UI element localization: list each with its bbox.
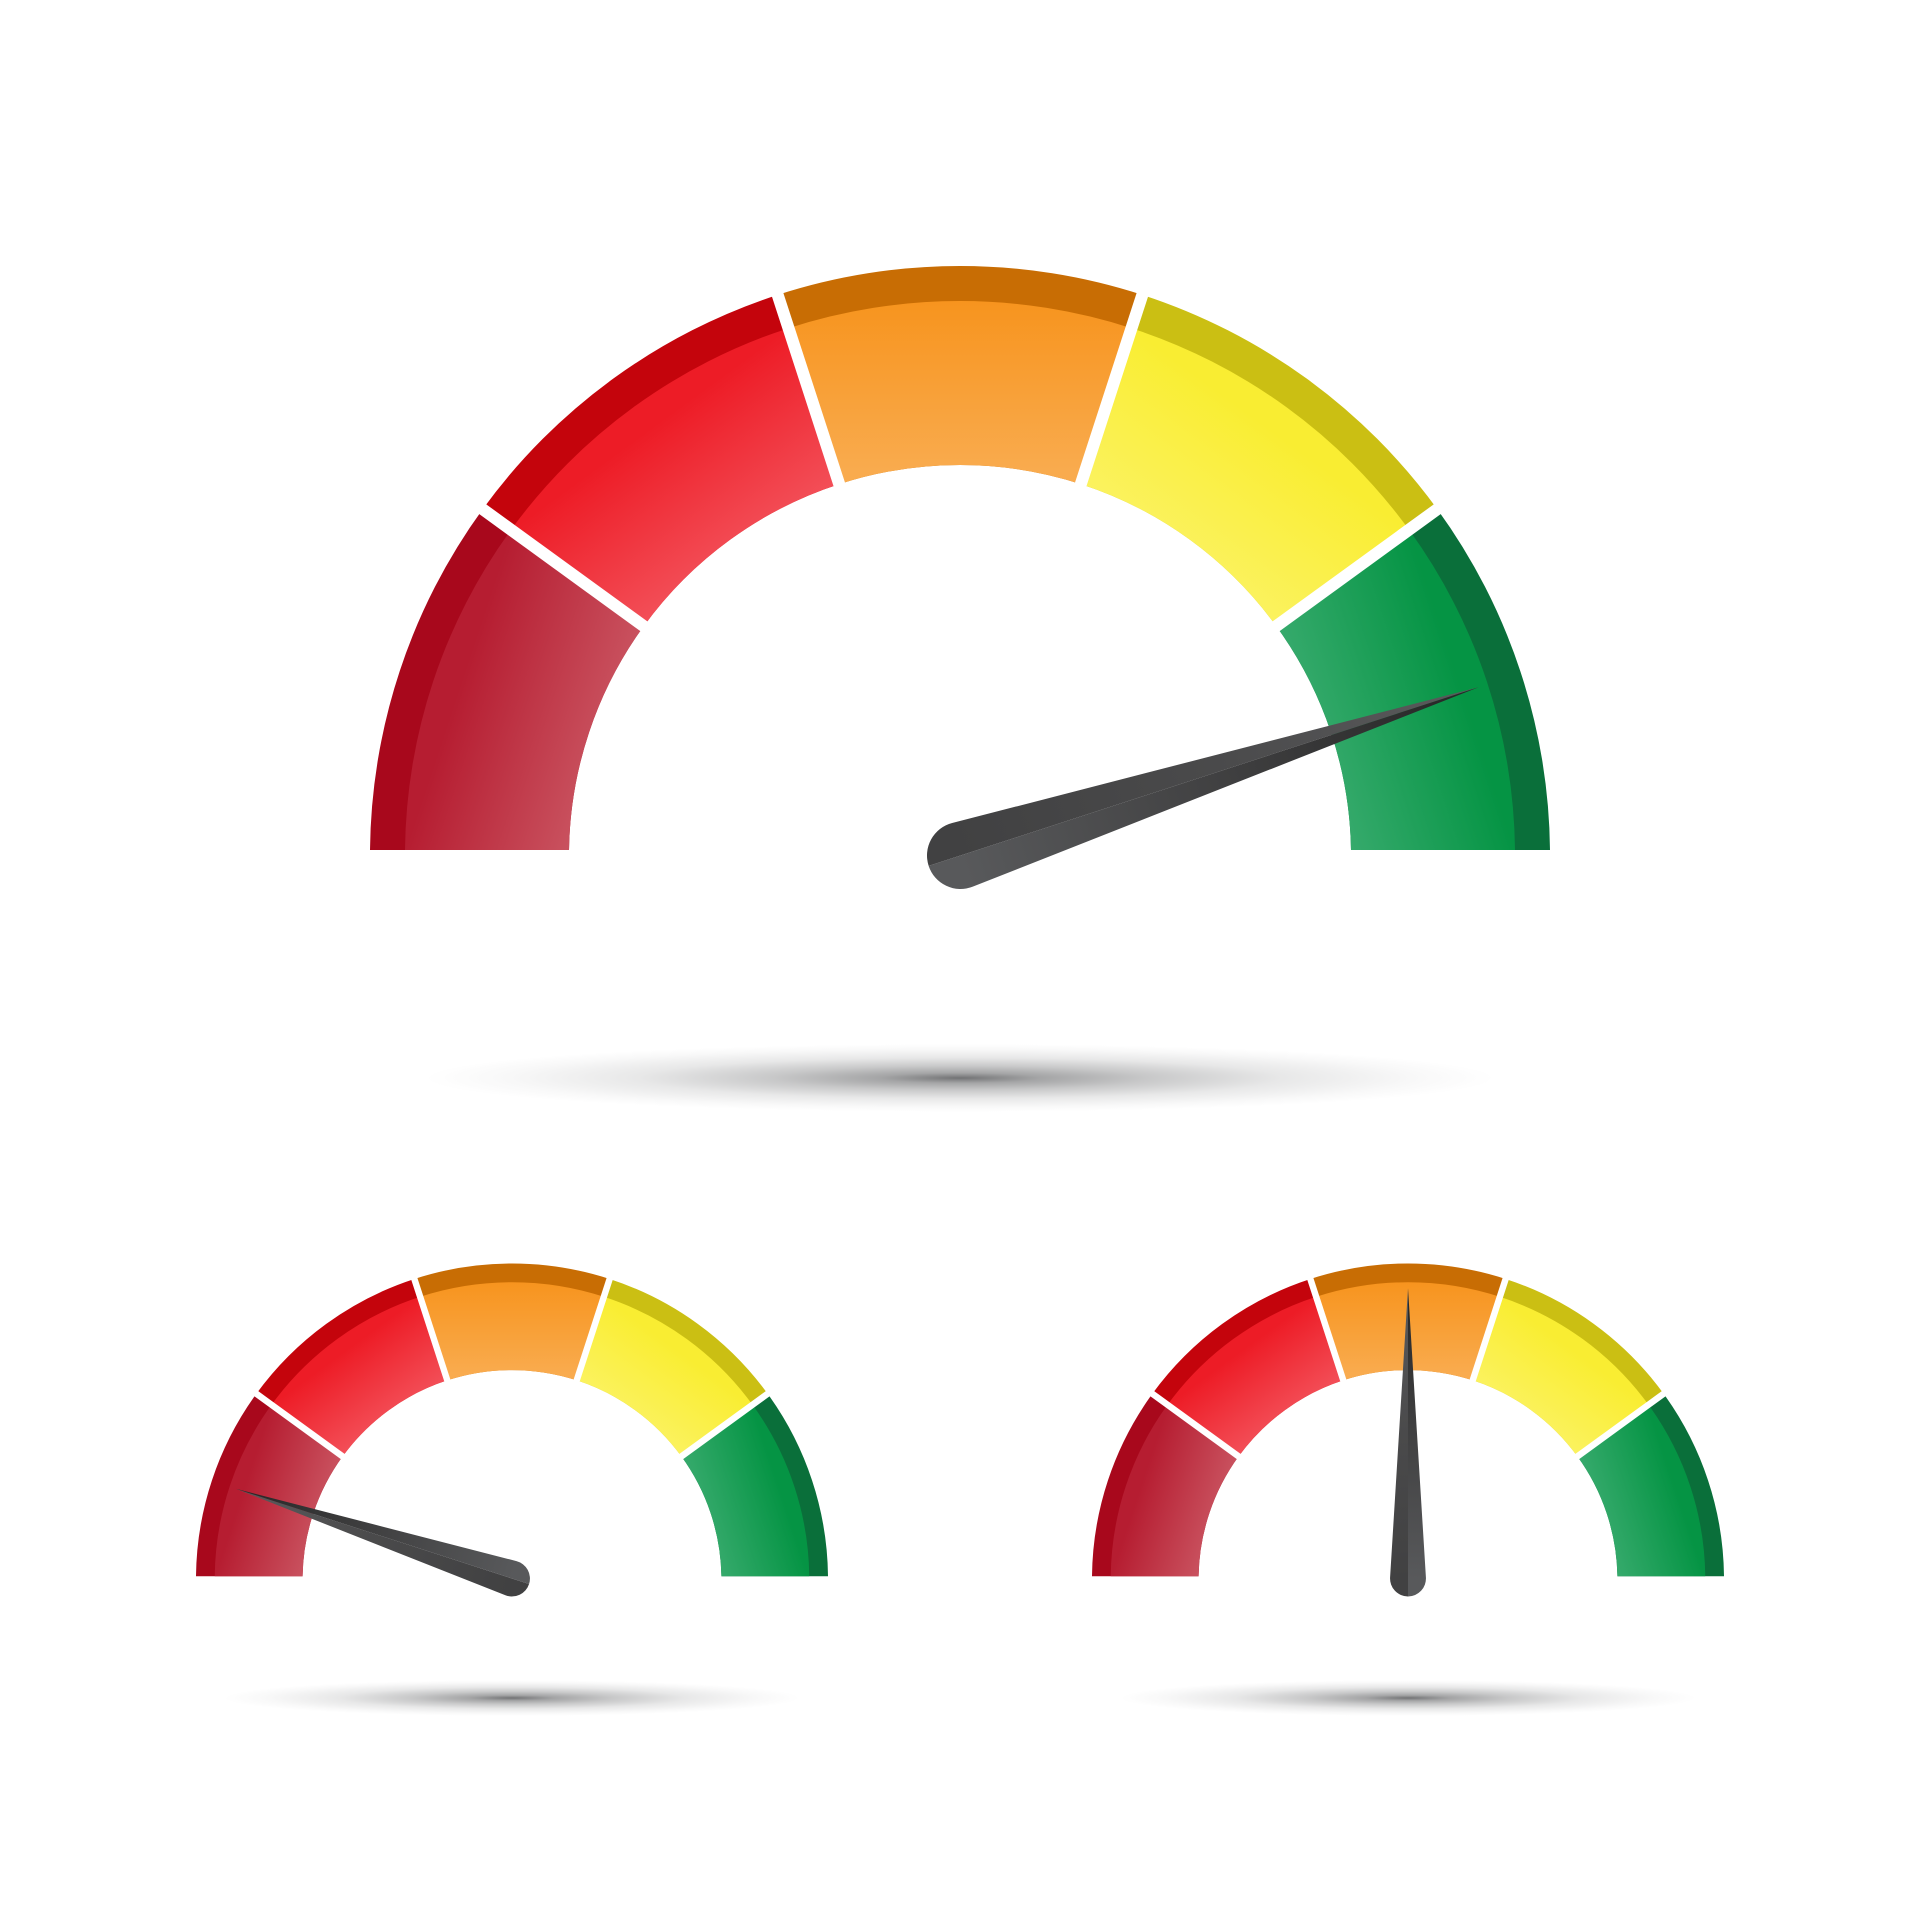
segment: yellow: [1081, 295, 1437, 626]
segment: orange: [414, 1263, 610, 1380]
segment: green: [1577, 1394, 1724, 1576]
segment: dark red: [370, 509, 644, 850]
segment: yellow: [1473, 1279, 1664, 1456]
needle: small gauge right: [1390, 1288, 1426, 1596]
shadow: small gauge right: [1120, 1680, 1696, 1716]
segment: green: [1276, 509, 1550, 850]
large gauge: [370, 266, 1550, 850]
segment: yellow: [577, 1279, 768, 1456]
segment: orange: [1310, 1263, 1506, 1380]
small gauge left: [196, 1263, 828, 1576]
segment: dark red: [1092, 1394, 1239, 1576]
segment: orange: [778, 266, 1142, 484]
shadow: large gauge: [425, 1044, 1495, 1112]
needle: large gauge: [918, 655, 1489, 898]
segment: green: [681, 1394, 828, 1576]
needle: small gauge left: [230, 1472, 535, 1601]
segment: dark red: [196, 1394, 343, 1576]
segment: red: [483, 295, 839, 626]
segment: red: [256, 1279, 447, 1456]
segment: red: [1152, 1279, 1343, 1456]
small gauge right: [1092, 1263, 1724, 1576]
shadow: small gauge left: [224, 1680, 800, 1716]
